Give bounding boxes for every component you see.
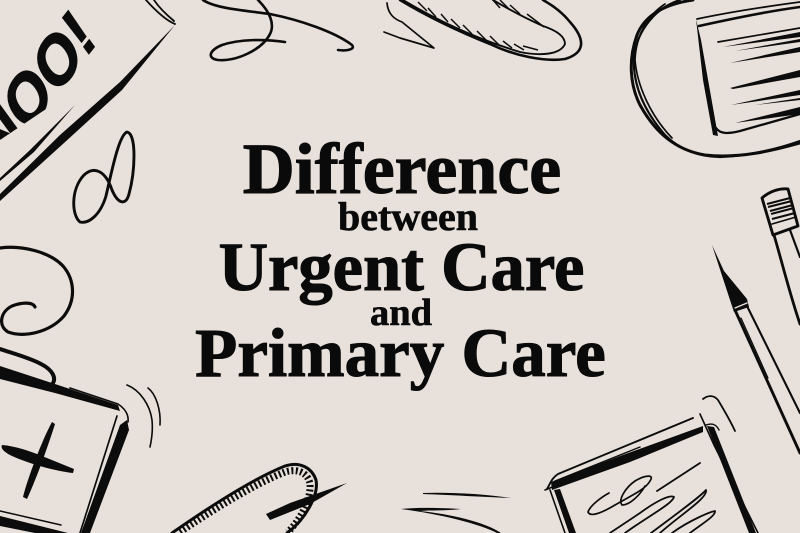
title line: Primary Care: Primary Care — [195, 315, 606, 391]
title line: Difference: Difference — [243, 129, 561, 209]
decorative infinity loop — [74, 132, 134, 222]
icon: first aid kit — [0, 349, 129, 533]
title — [195, 129, 606, 391]
title line: and: and — [370, 292, 432, 334]
icon: notebook bottom right — [545, 396, 758, 533]
icon: hatched feather bottom — [172, 464, 347, 533]
icon: pen right edge — [712, 245, 800, 453]
icon: pencil with eraser right edge — [762, 189, 800, 324]
title line: between: between — [338, 194, 478, 239]
motion lines by kit — [127, 385, 160, 447]
icon: curly swirl left — [0, 247, 73, 334]
icon: hatched leaf shape top — [384, 0, 581, 60]
icon: clipboard panel top right — [631, 0, 800, 157]
icon: tilted sign with exclamation text — [0, 0, 175, 201]
decorative brush strokes bottom — [401, 493, 511, 533]
title line: Urgent Care: Urgent Care — [219, 229, 584, 305]
decorative swirl top — [203, 0, 353, 60]
